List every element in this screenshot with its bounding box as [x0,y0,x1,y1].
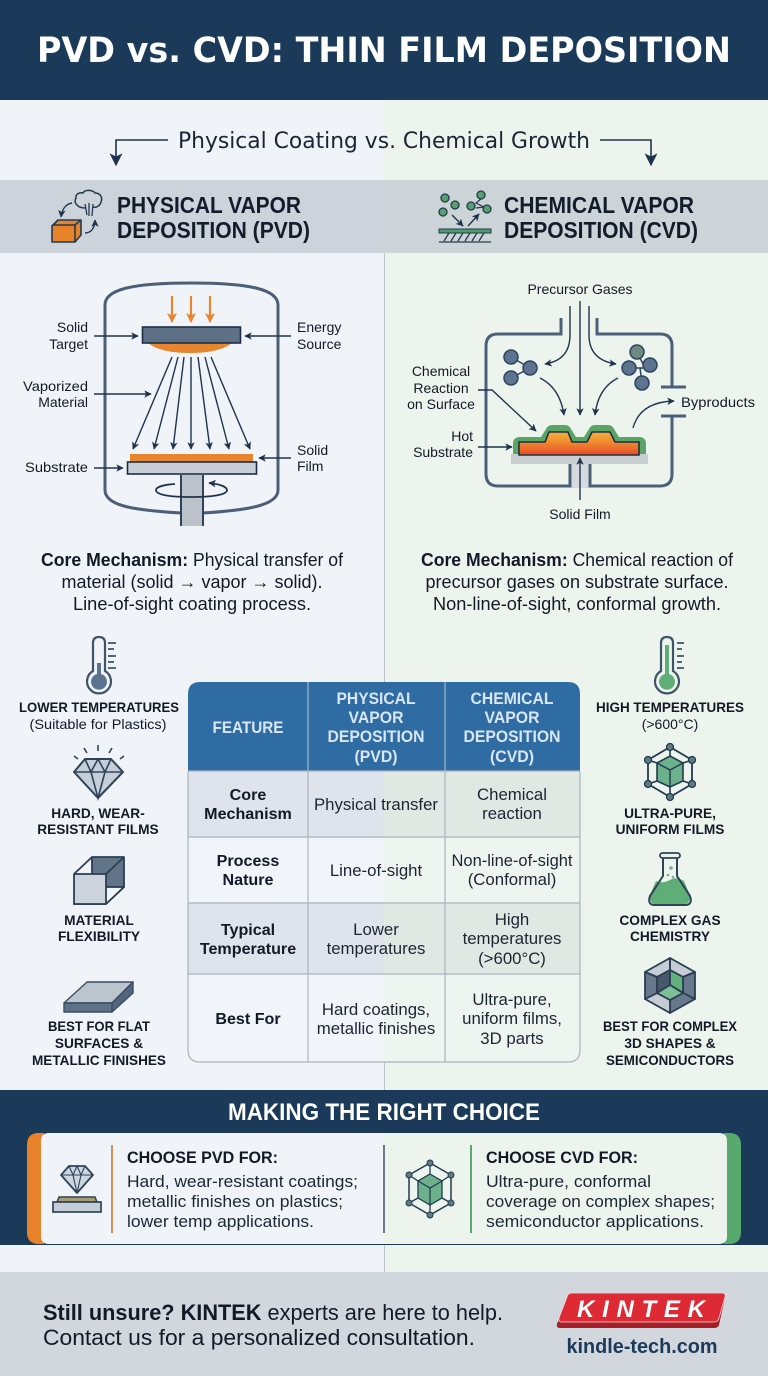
callout labels: Target [49,336,88,352]
rotating stem [156,475,227,526]
row: process nature: (Conformal) [468,870,556,889]
feature: lower temperatures: LOWER TEMPERATURES [19,700,179,715]
text: choose CVD: coverage on complex shapes; [486,1193,715,1211]
logo: KINTEK: kindle-tech.com [566,1335,718,1358]
row: typical temperature: (>600°C) [478,949,546,968]
callout labels: on Surface [407,396,475,412]
feature: ultra-pure films [616,744,724,837]
icon: flat plate [64,982,133,1012]
feature: flat surfaces: BEST FOR FLAT [48,1019,151,1034]
feature: high temperatures [596,637,744,732]
row: process nature: Process [217,852,279,870]
feature: lower temperatures [19,637,179,732]
feature: hard films [37,745,159,837]
icon: thermometer [655,637,684,693]
row: typical temperature: Temperature [200,940,296,958]
callout labels [407,281,755,522]
table grid [188,682,580,1062]
panel heading: CVD: DEPOSITION (CVD) [504,217,698,243]
feature: flat surfaces: SURFACES & [55,1036,143,1051]
feature: high temperatures: HIGH TEMPERATURES [596,700,744,715]
text: choose PVD: metallic finishes on plastics; [127,1193,343,1211]
feature: complex gas chemistry: COMPLEX GAS [619,913,721,928]
callout labels: Material [38,394,88,410]
row: typical temperature: temperatures [327,939,425,958]
feature: flat surfaces [32,982,166,1068]
icon: diamond on substrate [53,1166,101,1212]
row: process nature: Nature [223,871,274,889]
text: choose PVD: lower temp applications. [127,1213,314,1231]
text: choose CVD: CHOOSE CVD FOR: [486,1149,638,1167]
gas exit channel [570,462,590,488]
row: process nature: Line-of-sight [330,861,423,880]
feature: material flexibility: MATERIAL [64,913,134,928]
text: choose PVD: Hard, wear-resistant coatings; [127,1173,358,1191]
feature: lower temperatures: (Suitable for Plastics) [30,716,166,732]
chamber wall [105,283,278,513]
row: best for: metallic finishes [317,1019,435,1038]
row: core mechanism: Core [230,786,266,804]
heading text: PHYSICAL VAPOR [117,192,301,218]
panel heading: CVD [384,180,768,253]
text: choose PVD: CHOOSE PVD FOR: [127,1149,278,1167]
callout labels: Substrate [413,444,473,460]
icon: crystal lattice [644,744,696,800]
feature: ultra-pure films: ULTRA-PURE, [624,806,716,821]
text block: PVD core mechanism: Line-of-sight coating process. [73,594,311,614]
title banner: PVD vs. CVD: THIN FILM DEPOSITION [37,31,731,71]
row: typical temperature [200,910,561,968]
row: core mechanism [204,785,547,823]
feature: material flexibility: FLEXIBILITY [58,929,140,944]
feature: complex shapes: SEMICONDUCTORS [606,1053,734,1068]
subtitle with arrows: Physical Coating vs. Chemical Growth [178,129,590,154]
vapor rays [133,357,250,449]
panel: making the right choice [0,1090,768,1245]
icon: layered hexagon [645,958,695,1013]
text: choose CVD: Ultra-pure, conformal [486,1173,651,1191]
table header: DEPOSITION [328,728,424,746]
row: typical temperature: temperatures [463,929,561,948]
choice card [27,1133,741,1244]
feature: complex shapes: BEST FOR COMPLEX [603,1019,738,1034]
row: typical temperature: Typical [221,921,275,939]
table header: FEATURE [212,719,284,737]
call to action text [43,1300,503,1350]
text: choose CVD [486,1149,715,1231]
text block: PVD core mechanism [41,550,344,614]
section heading: MAKING THE RIGHT CHOICE [228,1099,540,1126]
row: core mechanism: Physical transfer [314,795,438,814]
solid target [142,327,240,353]
text block: PVD core mechanism: material (solid → vapor → solid). [62,572,322,592]
row: process nature: Non-line-of-sight [452,851,573,870]
row: typical temperature: High [495,910,529,929]
table header: CHEMICAL [470,690,554,708]
table header: PHYSICAL [336,690,416,708]
diagram: PVD chamber [23,283,342,526]
title banner [0,0,768,100]
icon: open box [74,857,124,904]
text: choose PVD [127,1149,358,1231]
row: best for: Hard coatings, [322,1000,430,1019]
callout labels: Byproducts [681,394,755,410]
table header: (PVD) [354,748,398,766]
text block: CVD core mechanism [421,550,734,614]
callout labels: Film [297,458,323,474]
text: choose CVD: semiconductor applications. [486,1213,704,1231]
feature: complex shapes [603,958,738,1068]
callout labels: Reaction [413,380,469,396]
feature: complex shapes: 3D SHAPES & [624,1036,716,1051]
panel heading: PVD [0,180,384,253]
feature: flat surfaces: METALLIC FINISHES [32,1053,166,1068]
feature: ultra-pure films: UNIFORM FILMS [616,822,724,837]
panel heading: PVD: DEPOSITION (PVD) [117,217,310,243]
table header: VAPOR [484,709,540,727]
callout labels: Energy [297,319,341,335]
callout labels: Solid [57,319,88,335]
callout labels: Hot [451,428,473,444]
precursor molecules [504,345,657,390]
row: best for: Best For [215,1010,281,1028]
row: best for: uniform films, [462,1009,562,1028]
panel: CVD features [596,637,744,1068]
callout labels: Source [297,336,342,352]
row: process nature [217,851,573,889]
icon: crystal lattice [406,1160,454,1218]
comparison table [188,682,580,1062]
table header [188,682,580,771]
energy arrows [172,296,210,322]
feature: hard films: HARD, WEAR- [51,806,145,821]
callout labels: Vaporized [23,378,88,394]
table header: VAPOR [348,709,404,727]
row: core mechanism: reaction [482,804,542,823]
feature: complex gas chemistry [619,853,721,944]
feature: material flexibility [58,857,140,944]
text block: PVD core mechanism: Core Mechanism: Physical transfer of [41,550,344,570]
feature: hard films: RESISTANT FILMS [37,822,159,837]
text block: CVD core mechanism: precursor gases on substrate surface. [426,572,728,592]
text block: CVD core mechanism: Non-line-of-sight, conformal growth. [433,594,721,614]
diagram: CVD chamber [407,281,755,522]
icon: thermometer [87,637,116,693]
heading text: CHEMICAL VAPOR [504,192,694,218]
feature: complex gas chemistry: CHEMISTRY [630,929,710,944]
callout labels [23,319,342,475]
text block: CVD core mechanism: Core Mechanism: Chemical reaction of [421,550,734,570]
icon: cube vaporizing [52,190,102,242]
callout labels: Precursor Gases [527,281,633,297]
row: core mechanism: Chemical [477,785,547,804]
icon: molecules on a surface [439,191,491,242]
callout labels: Solid Film [549,506,611,522]
row: typical temperature: Lower [353,920,399,939]
callout labels: Chemical [412,363,470,379]
logo: KINTEK: KINTEK [577,1296,707,1323]
icon: flask [649,853,691,905]
substrate and solid film [128,454,256,474]
callout labels: Solid [297,442,328,458]
table header: DEPOSITION [464,728,560,746]
row: best for [215,990,562,1048]
panel: PVD features [19,637,179,1068]
row: core mechanism: Mechanism [204,805,292,823]
feature: high temperatures: (>600°C) [642,716,698,732]
callout labels: Substrate [25,459,88,475]
row: best for: Ultra-pure, [472,990,552,1009]
call to action text: Still unsure? KINTEK experts are here to help. [43,1300,503,1325]
table rows background [188,771,580,1062]
table header: (CVD) [490,748,534,766]
call to action text: Contact us for a personalized consultation. [43,1325,475,1350]
substrate with film [511,425,648,464]
icon: diamond [74,745,124,798]
row: best for: 3D parts [480,1029,544,1048]
subtitle with arrows [116,129,651,165]
flow arrows [478,301,674,500]
logo: KINTEK [557,1293,725,1358]
chamber wall [486,318,686,486]
footer [0,1272,768,1376]
